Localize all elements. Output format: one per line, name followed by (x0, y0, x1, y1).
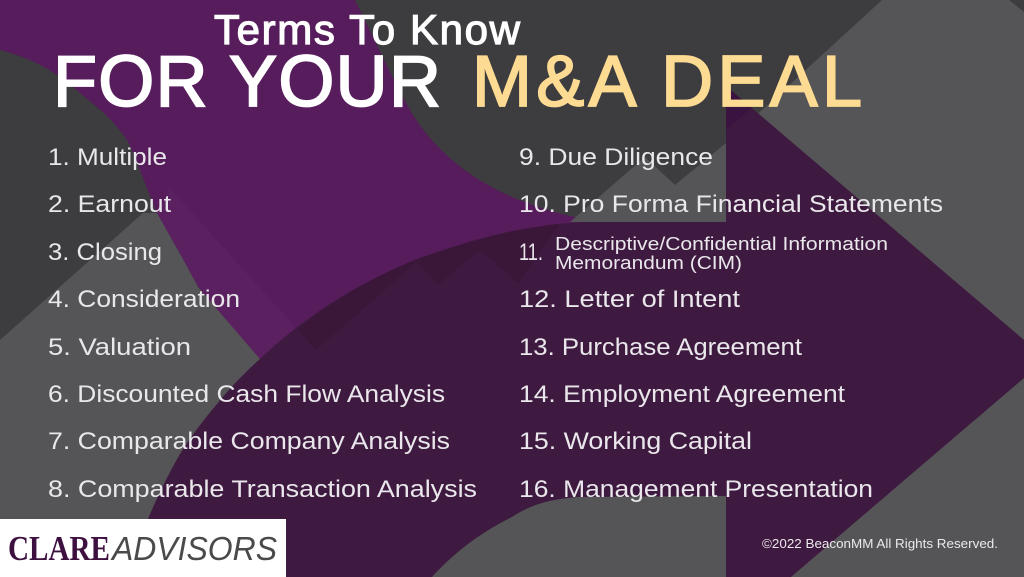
list: terms 1 to 8: 5. Valuation (48, 334, 191, 361)
list: terms 9 to 16 (519, 144, 943, 503)
list: terms 9 to 16: 10. Pro Forma Financial Statements (519, 191, 943, 218)
title: Terms To Know: Terms To Know (214, 6, 521, 53)
heading: FOR YOUR M&A DEAL: FOR YOUR (53, 42, 441, 122)
list: terms 1 to 8: 8. Comparable Transaction Analysis (48, 476, 477, 503)
heading: FOR YOUR M&A DEAL: M&A DEAL (472, 42, 862, 122)
list: terms 9 to 16: 12. Letter of Intent (519, 286, 740, 313)
list: terms 9 to 16: Descriptive/Confidential Information (555, 234, 888, 254)
logo: Clare Advisors: ADVISORS (110, 530, 277, 567)
list: terms 1 to 8: 4. Consideration (48, 286, 240, 313)
heading: FOR YOUR M&A DEAL (53, 42, 862, 122)
list: terms 1 to 8: 7. Comparable Company Analysis (48, 428, 450, 455)
list: terms 9 to 16: 11. (519, 239, 543, 266)
list: terms 9 to 16: 14. Employment Agreement (519, 381, 845, 408)
list: terms 1 to 8: 6. Discounted Cash Flow Analysis (48, 381, 445, 408)
list: terms 9 to 16: 9. Due Diligence (519, 144, 713, 171)
logo: Clare Advisors (0, 519, 286, 577)
list: terms 9 to 16: Memorandum (CIM) (555, 253, 742, 273)
list: terms 1 to 8: 3. Closing (48, 239, 162, 266)
list: terms 1 to 8: 1. Multiple (48, 144, 167, 171)
copyright notice: ©2022 BeaconMM All Rights Reserved. (762, 537, 998, 551)
list: terms 1 to 8 (48, 144, 477, 503)
list: terms 9 to 16: 15. Working Capital (519, 428, 752, 455)
list: terms 9 to 16: 13. Purchase Agreement (519, 334, 802, 361)
list: terms 9 to 16: 16. Management Presentation (519, 476, 873, 503)
list: terms 1 to 8: 2. Earnout (48, 191, 171, 218)
logo: Clare Advisors: CLARE (8, 529, 110, 568)
